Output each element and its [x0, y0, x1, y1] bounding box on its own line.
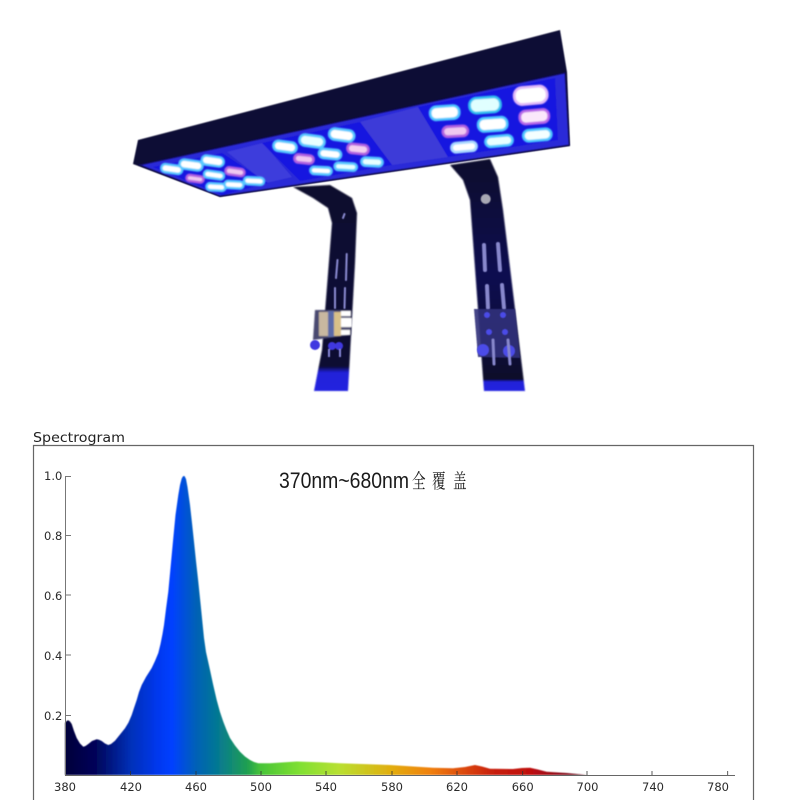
x axis: 740 [642, 780, 664, 794]
chart title: 盖 [453, 470, 467, 493]
left mounting arm [293, 185, 357, 391]
x axis: 500 [250, 780, 272, 794]
middle LED module [273, 128, 383, 175]
x axis: 420 [120, 780, 142, 794]
x axis: 780 [707, 780, 729, 794]
y axis [44, 469, 71, 775]
plate centre sections [227, 143, 292, 183]
chart frame [34, 446, 754, 800]
right mounting arm [450, 159, 525, 391]
y axis: 0.8 [44, 529, 62, 543]
lamp underside plate [140, 73, 569, 196]
chart title: 370nm~680nm [279, 468, 409, 493]
x axis: 580 [381, 780, 403, 794]
x axis: 700 [577, 780, 598, 794]
right LED module [430, 85, 552, 153]
x axis: 620 [446, 780, 468, 794]
chart title: 全 [412, 470, 426, 493]
x axis: 460 [185, 780, 207, 794]
y axis: 0.2 [44, 709, 62, 723]
chart heading: Spectrogram [33, 430, 125, 446]
spectrum area chart [65, 476, 587, 775]
y axis: 1.0 [44, 469, 62, 483]
x axis [54, 771, 735, 794]
x axis: 380 [54, 780, 76, 794]
chart title: 覆 [432, 470, 446, 493]
y axis: 0.4 [44, 649, 62, 663]
x axis: 660 [512, 780, 534, 794]
product photo: LED aquarium light [133, 30, 570, 391]
left LED module [161, 155, 264, 191]
y axis: 0.6 [44, 589, 62, 603]
lamp housing top face [133, 30, 570, 197]
LED module backings [153, 153, 268, 195]
x axis: 540 [315, 780, 337, 794]
